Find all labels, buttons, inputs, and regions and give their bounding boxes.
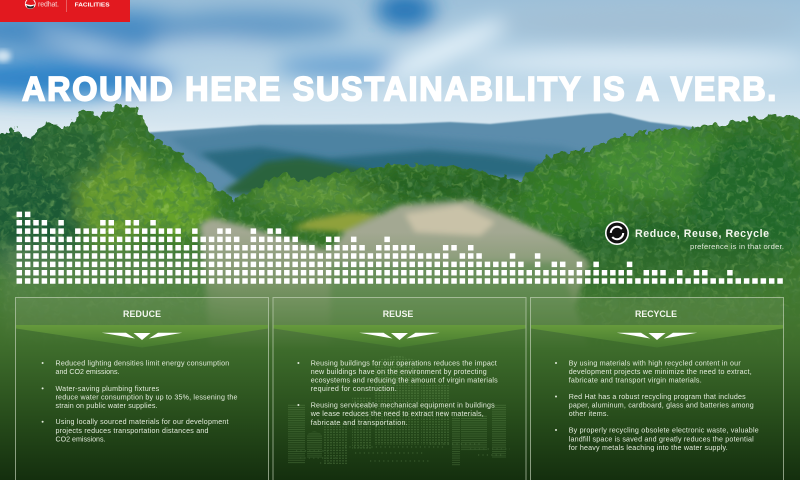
icon: recycle arrows [605, 221, 629, 245]
text: reuse bullets: ecosystems and reducing the amount of virgin materials [311, 376, 498, 384]
text: reduce bullets: Water-saving plumbing fixtures [56, 385, 160, 393]
panel: reduce [16, 298, 268, 480]
callout: reduce reuse recycle [605, 221, 784, 251]
callout heading: Reduce, Reuse, Recycle [635, 228, 769, 240]
text: recycle bullets [555, 359, 759, 452]
text: recycle bullets: paper, aluminum, cardboard, glass and batteries among [569, 402, 754, 410]
panel: recycle [530, 298, 784, 480]
foliage mass [0, 104, 800, 344]
distant mountains [140, 113, 800, 230]
panel header band [16, 325, 268, 348]
heading: reduce: REDUCE [123, 309, 161, 319]
heading: reuse: REUSE [383, 309, 413, 319]
text: reduce bullets: projects reduces transportation distances and [56, 427, 209, 435]
chart: column dot graphic [19, 211, 780, 284]
text: reuse bullets: required for construction. [311, 385, 397, 393]
text: reduce bullets [42, 359, 238, 444]
icon: arrow [102, 333, 182, 340]
panel: reuse [273, 298, 526, 480]
illustration: city skyline [288, 355, 510, 466]
text: reuse bullets: Reusing serviceable mechanical equipment in buildings [311, 402, 495, 410]
icon: arrow [359, 333, 440, 340]
text: reduce bullets: Using locally sourced materials for our development [56, 418, 229, 426]
panel header band [531, 325, 783, 348]
text: recycle bullets: development projects we minimize the need to extract, [569, 368, 752, 376]
callout subtext: preference is in that order. [690, 242, 784, 251]
rocky clearing [200, 200, 590, 350]
text: reduce bullets: and CO2 emissions. [56, 368, 120, 376]
text: recycle bullets: other items. [569, 410, 609, 418]
text: recycle bullets: Red Hat has a robust recycling program that includes [569, 393, 746, 401]
department name: FACILITIES [75, 2, 110, 8]
panel header band [274, 325, 526, 348]
icon: arrow [617, 333, 697, 340]
text: recycle bullets: for heavy metals leaching into the water supply. [569, 444, 728, 452]
text: reuse bullets: we lease reduces the need to extract new materials, [310, 410, 484, 418]
logo bar [0, 0, 130, 22]
text: reuse bullets: Reusing buildings for our operations reduces the impact [311, 359, 497, 367]
text: reduce bullets: strain on public water supplies. [56, 402, 158, 410]
heading: recycle: RECYCLE [635, 309, 677, 319]
text: reuse bullets [297, 359, 498, 427]
text: reduce bullets: CO2 emissions. [56, 436, 106, 444]
text: recycle bullets: fabricate and transport virgin materials. [569, 376, 702, 384]
text: reduce bullets: reduce water consumption by up to 35%, lessening the [56, 393, 238, 401]
icon: red hat logo [25, 0, 36, 9]
text: recycle bullets: By properly recycling obsolete electronic waste, valuable [569, 427, 759, 435]
text: reuse bullets: new buildings have on the environment by protecting [311, 368, 487, 376]
text: reuse bullets: fabricate and transportation. [311, 419, 408, 427]
text: recycle bullets: By using materials with high recycled content in our [569, 359, 741, 367]
brand name: redhat. [38, 2, 59, 9]
text: recycle bullets: landfill space is saved and greatly reduces the potential [569, 435, 754, 443]
text: reduce bullets: Reduced lighting densities limit energy consumption [56, 359, 229, 367]
